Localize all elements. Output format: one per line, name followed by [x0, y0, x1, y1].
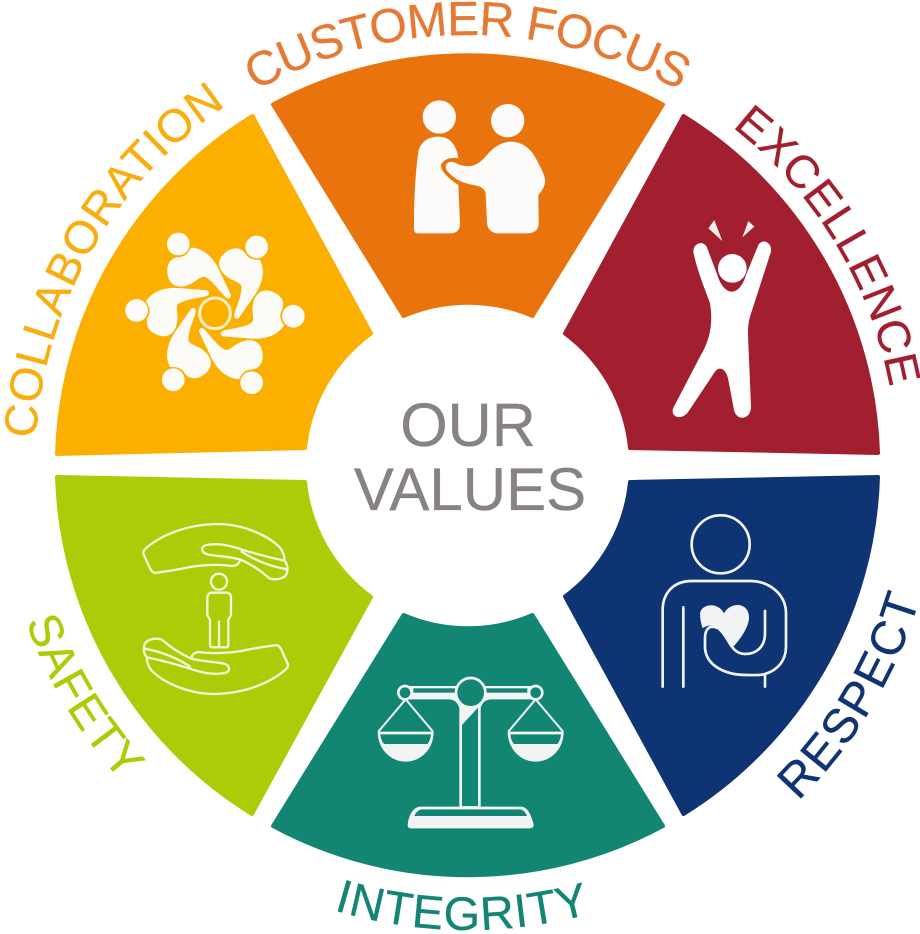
icon: two people, hand on shoulder — [414, 100, 545, 233]
wedge: customer focus — [273, 55, 663, 316]
icon: six people in a circle — [121, 231, 309, 395]
panel: safety — [29, 475, 374, 816]
icon: hands protecting a person — [143, 524, 288, 694]
panel: respect — [562, 475, 916, 816]
label: safety: SAFETY — [29, 615, 146, 772]
center title: our values: VALUES — [354, 456, 586, 523]
wedge: integrity — [273, 615, 663, 875]
label: collaboration: COLLABORATION — [5, 82, 224, 435]
icon: cheering person — [673, 220, 771, 418]
icon: person with hand on heart — [663, 515, 786, 687]
icon: balance scales — [378, 678, 564, 828]
wedge: excellence — [565, 116, 878, 453]
wedge: safety — [57, 477, 371, 814]
center title: our values: OUR — [400, 391, 536, 459]
panel: collaboration — [5, 82, 374, 456]
center title: our values — [354, 391, 586, 523]
wedge: respect — [565, 477, 878, 814]
panel: integrity — [270, 613, 666, 930]
panel: customer focus — [247, 2, 690, 318]
panel: excellence — [562, 104, 920, 455]
wedge: collaboration — [57, 116, 371, 454]
